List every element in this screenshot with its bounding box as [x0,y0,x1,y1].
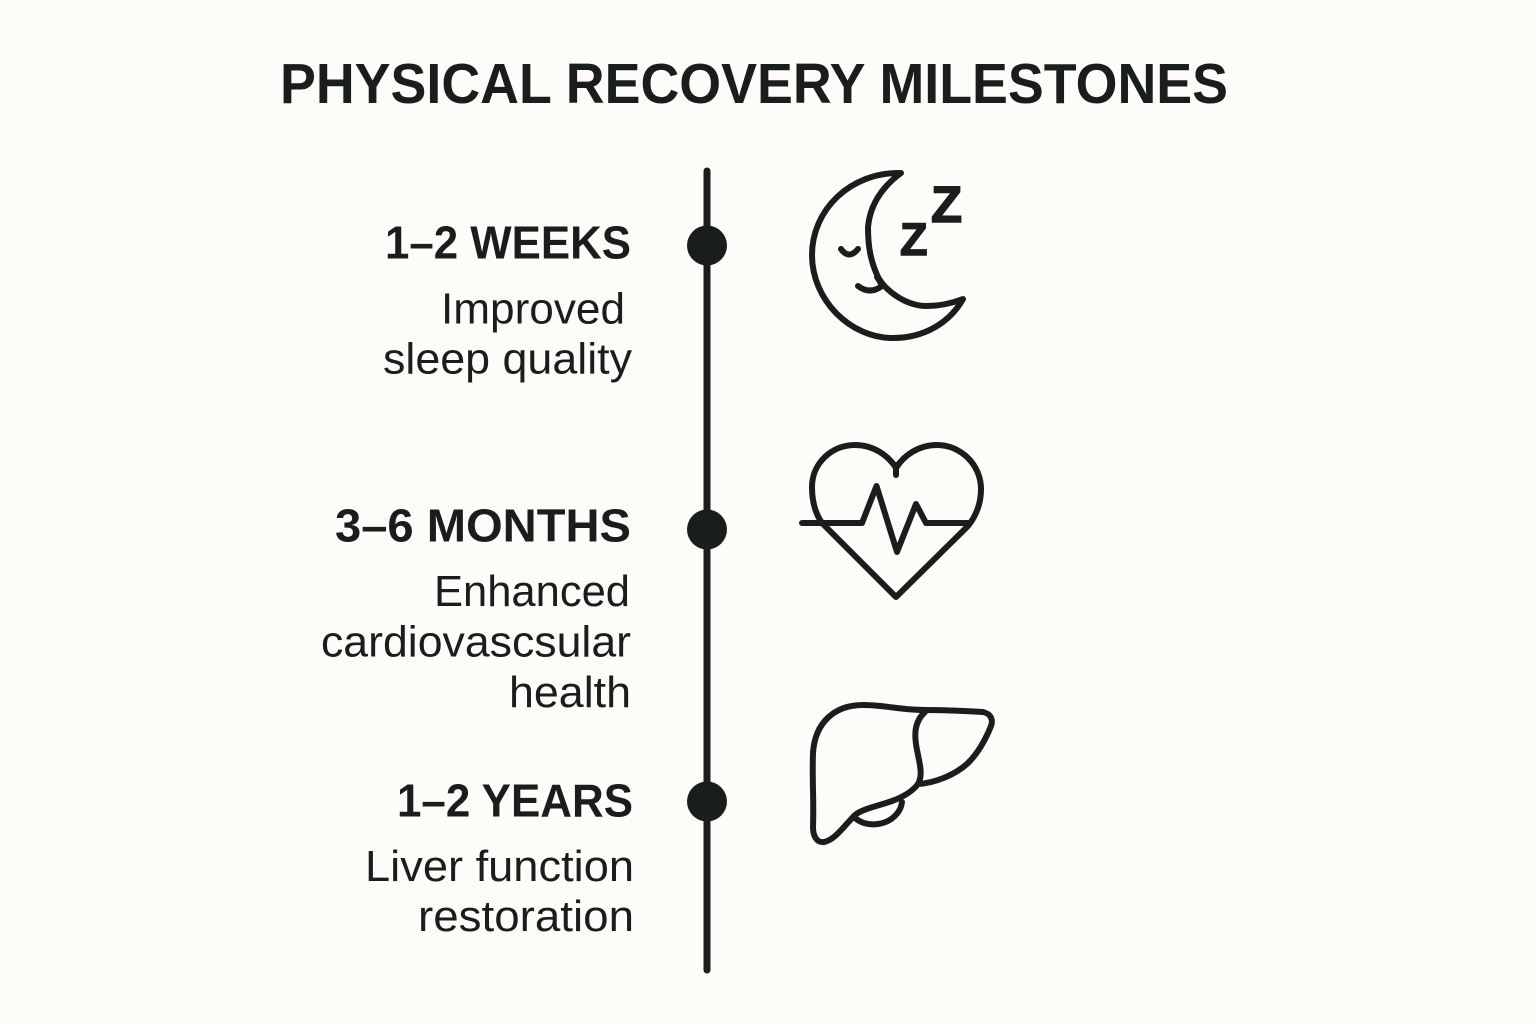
icon: sleeping moon: Z [931,176,962,233]
description: Improved [441,286,625,334]
timeline dot: 3–6 months [687,510,727,550]
milestone text: 1–2 years [365,774,634,941]
description [383,286,632,384]
description [321,568,631,717]
title: PHYSICAL RECOVERY MILESTONES [280,52,1228,116]
heading: 1–2 YEARS [397,774,633,826]
description: Liver function [365,843,634,891]
description [365,843,634,941]
icon: heart with pulse [802,445,981,597]
milestone text: 1–2 weeks [383,216,632,384]
icon: sleeping moon [812,173,963,338]
timeline dot: 1–2 weeks [687,226,727,266]
description: sleep quality [383,336,632,384]
description: Enhanced [434,568,630,616]
description: health [509,669,631,717]
icon: sleeping moon: Z [900,214,928,265]
description: cardiovascsular [321,618,631,666]
timeline axis [687,171,727,970]
timeline dot: 1–2 years [687,782,727,822]
icon: liver [813,705,992,842]
description: restoration [418,893,634,941]
heading: 3–6 MONTHS [335,500,631,552]
milestone text: 3–6 months [321,500,631,717]
heading: 1–2 WEEKS [385,216,631,268]
